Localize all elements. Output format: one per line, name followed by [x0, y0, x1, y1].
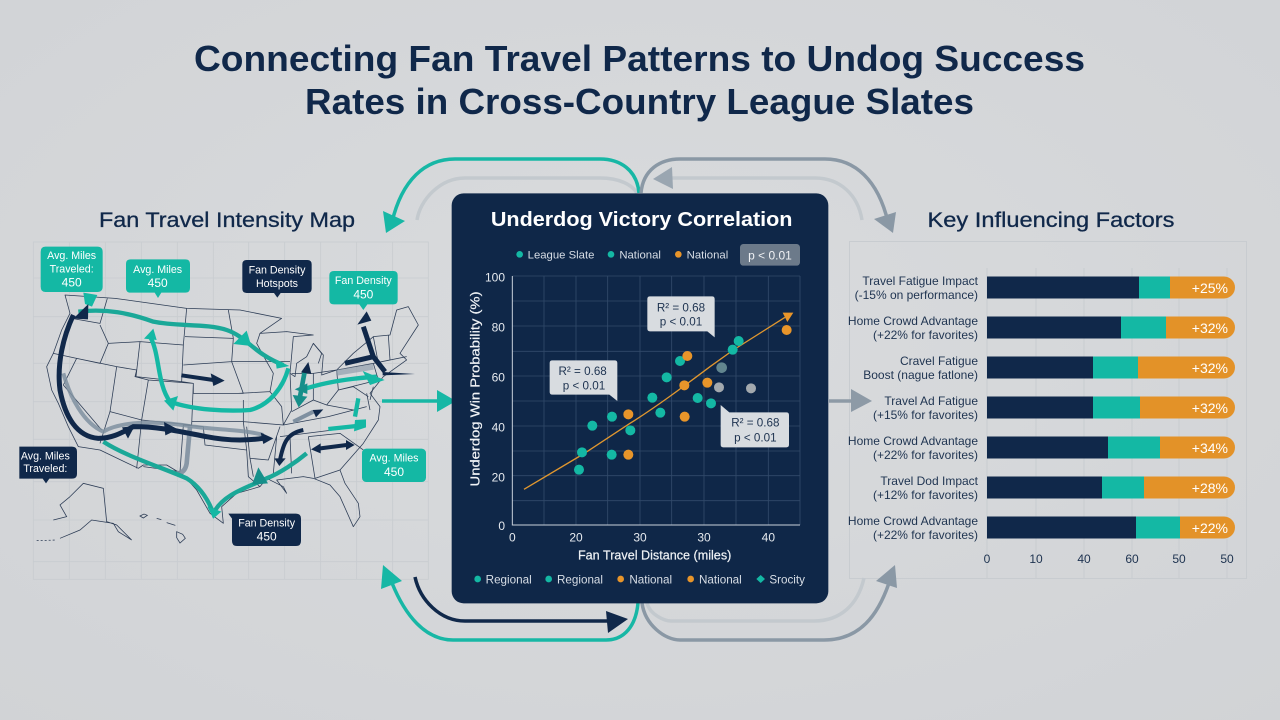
route arrows: navy	[59, 315, 385, 460]
bar value labels: +32%	[1192, 320, 1228, 336]
callout: fan density hotspots	[242, 260, 312, 298]
top legend: League Slate	[528, 249, 594, 261]
callout: avg miles 450 right: Avg. Miles	[370, 453, 418, 465]
callout: avg miles traveled 450 top left: Avg. Miles	[47, 250, 96, 262]
callout: avg miles 450	[126, 259, 190, 298]
bar category labels: Cravel Fatigue	[900, 354, 978, 368]
bar value labels	[1192, 280, 1228, 536]
y axis labels: 80	[492, 320, 505, 334]
panel: underdog victory correlation	[452, 193, 828, 603]
top legend	[516, 244, 800, 266]
bar category labels: Home Crowd Advantage	[848, 514, 978, 528]
bottom legend: Regional	[486, 573, 532, 586]
callout: r squared top	[647, 296, 715, 337]
callout: avg miles traveled 450 top left: Traveled:	[50, 263, 94, 275]
data points: orange	[623, 325, 792, 460]
bar category labels: Home Crowd Advantage	[848, 434, 978, 448]
callout: fan density 450 bottom	[228, 514, 301, 546]
x axis labels: 30	[697, 531, 711, 545]
bar value labels: +34%	[1192, 440, 1228, 456]
bar rows	[987, 276, 1235, 538]
scatter plot grid	[512, 276, 800, 525]
callout: fan density hotspots: Hotspots	[256, 278, 298, 290]
arrow: chart to factors	[829, 389, 872, 412]
bottom legend: National	[629, 573, 672, 586]
panel: key influencing factors	[848, 242, 1246, 579]
bar category labels: Travel Ad Fatigue	[884, 394, 978, 408]
top legend: National	[619, 249, 661, 261]
bar axis labels	[984, 552, 1234, 566]
chart heading: Underdog Victory Correlation	[491, 208, 792, 231]
heading: fan travel intensity map: Fan Travel Intensity Map	[99, 209, 355, 232]
bar category labels: Boost (nague fatlone)	[863, 368, 978, 382]
callout: avg miles 450 right: 450	[384, 465, 404, 479]
bar value labels: +28%	[1192, 480, 1228, 496]
callout: fan density 450 bottom: Fan Density	[238, 518, 296, 530]
top legend: National	[687, 249, 728, 261]
bar value labels: +25%	[1192, 280, 1228, 296]
x axis labels: 0	[509, 531, 516, 545]
callout: r squared left	[550, 360, 617, 401]
data points: teal	[574, 336, 744, 475]
x axis labels: 20	[569, 531, 583, 545]
bar axis labels: 40	[1077, 552, 1091, 566]
bar category labels: (+12% for favorites)	[873, 488, 978, 502]
arrow: bottom teal loop	[381, 565, 638, 640]
bar category labels: (+22% for favorites)	[873, 328, 978, 342]
data points: grey	[714, 362, 756, 393]
bar category labels: (-15% on performance)	[855, 288, 978, 302]
panel: fan travel intensity map	[19, 242, 428, 579]
callout: fan density 450 bottom: 450	[257, 530, 277, 544]
bottom legend: National	[699, 573, 742, 586]
y axis labels: 0	[498, 519, 505, 533]
y axis labels: 60	[492, 370, 505, 384]
y axis labels: 20	[492, 470, 505, 484]
y axis labels	[485, 270, 505, 533]
bar value labels: +32%	[1192, 360, 1228, 376]
arrow: bottom navy	[415, 577, 628, 633]
title	[194, 38, 1085, 122]
callout: fan density 450	[329, 271, 398, 310]
x axis labels: 30	[633, 531, 647, 545]
bar category labels: Travel Dod Impact	[880, 474, 979, 488]
callout: r squared left: p < 0.01	[563, 379, 605, 392]
bottom legend: Regional	[557, 573, 603, 586]
callout: fan density 450: Fan Density	[335, 275, 392, 287]
x axis title: Fan Travel Distance (miles)	[578, 548, 731, 562]
bar axis labels: 50	[1172, 552, 1186, 566]
callout: avg miles traveled left: Avg. Miles	[21, 450, 70, 462]
bar axis labels: 60	[1125, 552, 1139, 566]
bottom legend	[474, 573, 805, 586]
callout: r squared right	[721, 405, 789, 447]
arrow: bottom grey loop	[642, 565, 897, 640]
bar category labels: (+22% for favorites)	[873, 448, 978, 462]
bar category labels: (+22% for favorites)	[873, 528, 978, 542]
title: Connecting Fan Travel Patterns to Undog Success	[194, 38, 1085, 79]
callout: avg miles 450: 450	[148, 276, 168, 290]
title: Rates in Cross-Country League Slates	[305, 81, 974, 122]
callout: avg miles traveled 450 top left: 450	[62, 276, 82, 290]
route arrows: teal	[78, 311, 377, 513]
callout: avg miles 450: Avg. Miles	[133, 264, 182, 276]
bar axis labels: 10	[1029, 552, 1043, 566]
bottom legend: Srocity	[769, 573, 805, 586]
callout: avg miles traveled left	[19, 447, 77, 483]
y axis labels: 40	[492, 420, 505, 434]
callout: r squared top: R² = 0.68	[657, 301, 705, 314]
trend line	[524, 313, 793, 489]
callout: fan density hotspots: Fan Density	[249, 264, 306, 276]
bar category labels	[848, 274, 979, 542]
bar value labels: +32%	[1192, 400, 1228, 416]
y axis labels: 100	[485, 270, 505, 284]
map: United States outline with state borders	[47, 295, 418, 527]
callout: r squared top: p < 0.01	[660, 316, 702, 329]
x axis labels	[509, 531, 775, 545]
top legend: p < 0.01	[748, 249, 792, 263]
bar category labels: (+15% for favorites)	[873, 408, 978, 422]
callout: avg miles traveled 450 top left	[41, 247, 103, 292]
y axis title: Underdog Win Probability (%)	[468, 291, 482, 486]
arrow: map to chart	[382, 390, 456, 412]
arrow: top grey loop	[641, 159, 896, 233]
callout: r squared left: R² = 0.68	[559, 365, 607, 378]
callout: r squared right: R² = 0.68	[731, 417, 779, 430]
arrow: top teal loop	[383, 159, 639, 233]
bar category labels: Home Crowd Advantage	[848, 314, 978, 328]
bar value labels: +22%	[1192, 520, 1228, 536]
callout: avg miles traveled left: Traveled:	[23, 463, 67, 475]
callout: avg miles 450 right	[362, 449, 426, 482]
callout: fan density 450: 450	[353, 287, 374, 301]
x axis labels: 40	[762, 531, 775, 545]
heading: key influencing factors: Key Influencing Factors	[928, 209, 1174, 232]
callout: r squared right: p < 0.01	[734, 431, 777, 444]
bar axis labels: 0	[984, 552, 991, 566]
bar category labels: Travel Fatigue Impact	[862, 274, 979, 288]
map: Alaska and Hawaii	[37, 483, 185, 543]
bar axis labels: 50	[1220, 552, 1234, 566]
route arrows: grey	[63, 367, 373, 473]
